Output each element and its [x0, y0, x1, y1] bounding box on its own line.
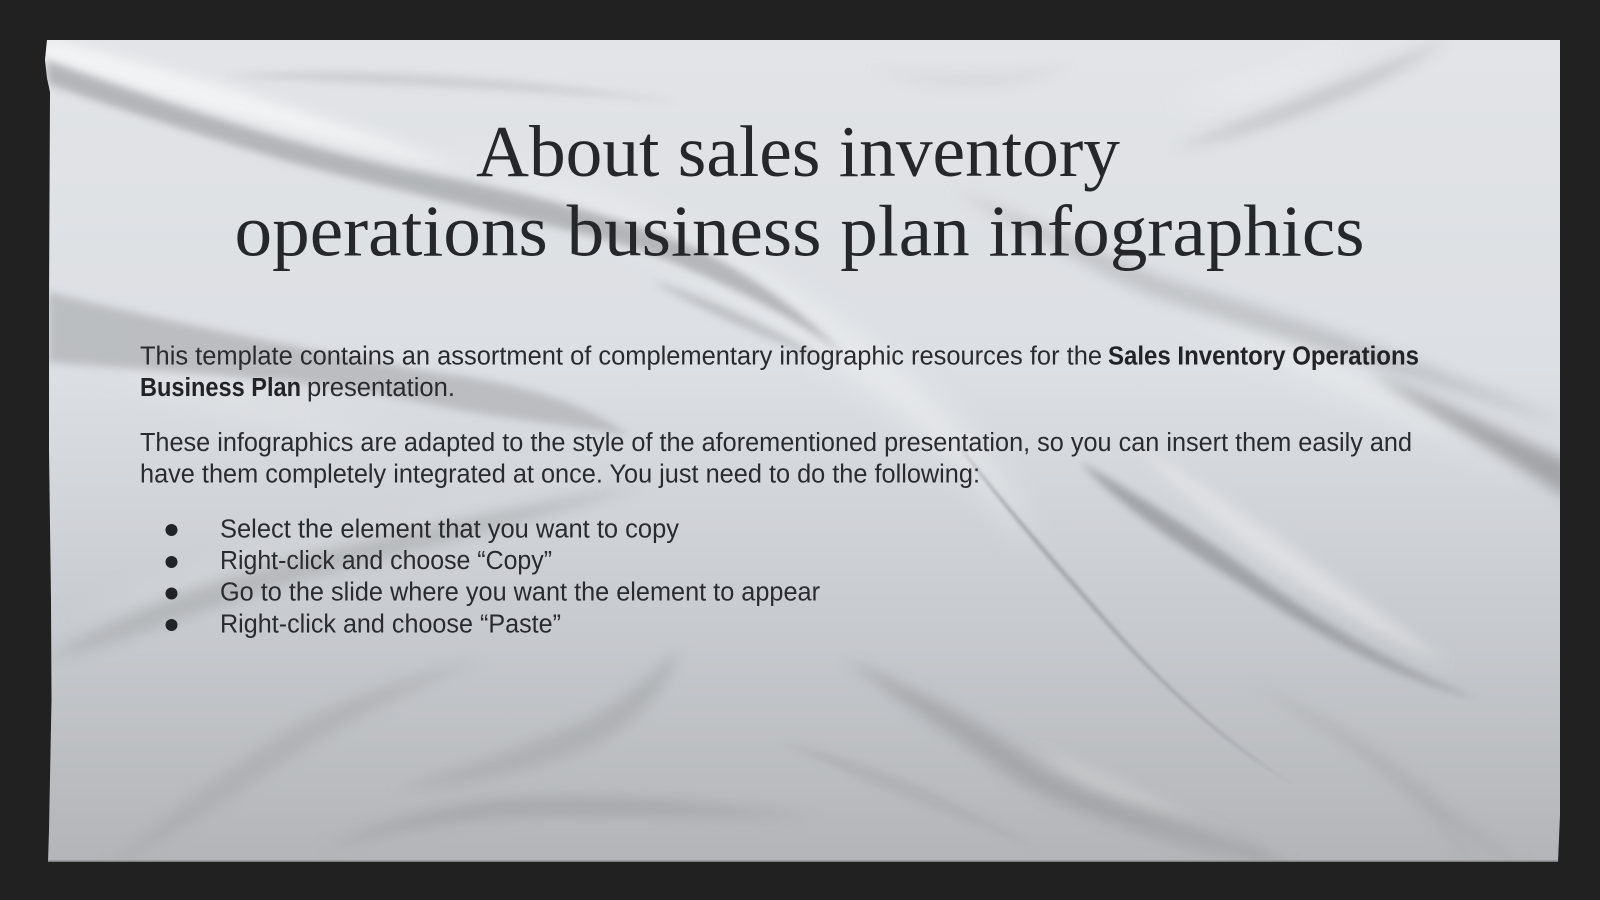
title: operations business plan infographics — [234, 190, 1365, 272]
title: About sales inventory — [476, 111, 1120, 192]
bullet list — [166, 516, 820, 638]
fold wedge left — [48, 292, 630, 436]
text block: intro paragraph: Sales Inventory Operations — [1108, 342, 1419, 370]
bullet list: Right-click and choose “Copy” — [220, 547, 552, 575]
bottom edge — [40, 860, 1570, 862]
bullet list: Select the element that you want to copy — [220, 516, 679, 544]
text block: intro paragraph: This template contains an assortment of complementary infographic resources for the — [140, 342, 1102, 370]
bullet list: Go to the slide where you want the element to appear — [220, 578, 820, 606]
text block: intro paragraph — [140, 342, 1419, 402]
text block: intro paragraph: presentation. — [307, 374, 455, 402]
text block: usage paragraph: These infographics are adapted to the style of the aforementioned presentation, so you can insert them easily and — [140, 429, 1412, 457]
fold highlights — [45, 40, 1470, 820]
text block: intro paragraph: Business Plan — [140, 374, 301, 402]
text block: usage paragraph: have them completely integrated at once. You just need to do the following: — [140, 460, 980, 488]
title — [234, 111, 1365, 272]
bullet list: Right-click and choose “Paste” — [220, 610, 561, 638]
text block: usage paragraph — [140, 429, 1412, 488]
